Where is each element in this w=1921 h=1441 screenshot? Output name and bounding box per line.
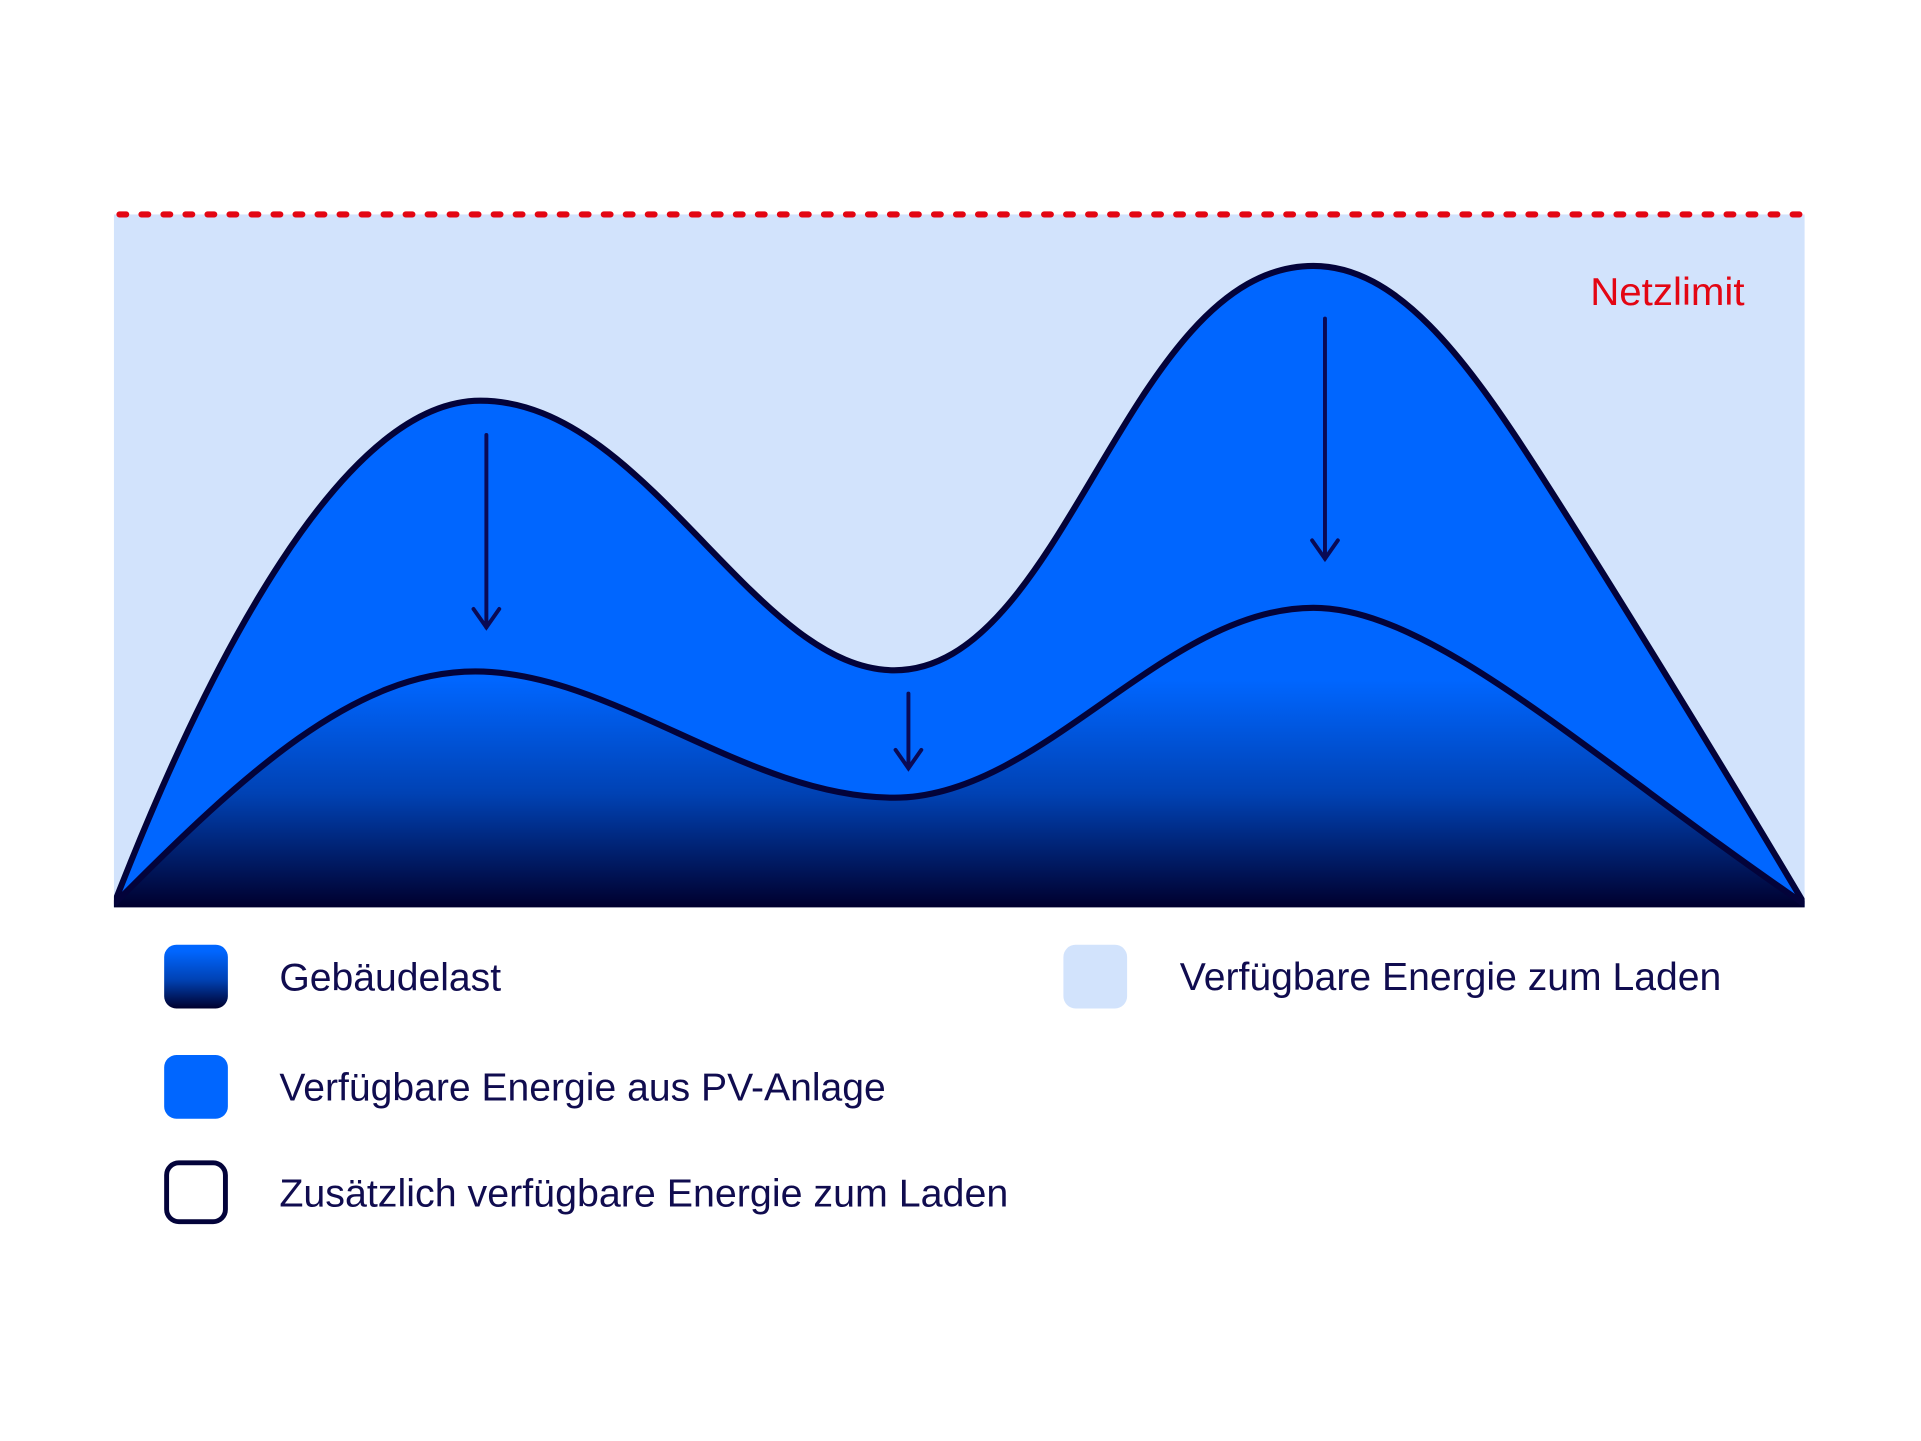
- legend swatch: PV energy: [164, 1055, 228, 1119]
- area: PV energy curve: [114, 266, 1805, 907]
- infographic: energy chart with legend: [114, 211, 1805, 1224]
- legend label: available charging energy: Verfügbare Energie zum Laden: [1180, 956, 1721, 999]
- legend swatch: building load: [164, 945, 228, 1008]
- label: Netzlimit: Netzlimit: [1590, 271, 1745, 314]
- arrow: right peak: [1312, 319, 1338, 559]
- legend label: PV energy: Verfügbare Energie aus PV-Anlage: [279, 1066, 886, 1109]
- grid limit dashed line: [119, 212, 1801, 217]
- legend label: additional energy: Zusätzlich verfügbare Energie zum Laden: [279, 1172, 1008, 1215]
- outline: lower curve: [114, 608, 1805, 904]
- arrow: middle valley: [896, 694, 921, 768]
- legend label: Gebäudelast: Gebäudelast: [279, 957, 501, 1000]
- panel: available charging energy background: [114, 214, 1805, 907]
- legend swatch: additional energy: [167, 1163, 225, 1222]
- outline: upper curve: [114, 266, 1805, 904]
- arrow: left peak: [474, 435, 499, 627]
- area: building load: [114, 608, 1805, 907]
- legend swatch: available charging energy: [1063, 945, 1127, 1008]
